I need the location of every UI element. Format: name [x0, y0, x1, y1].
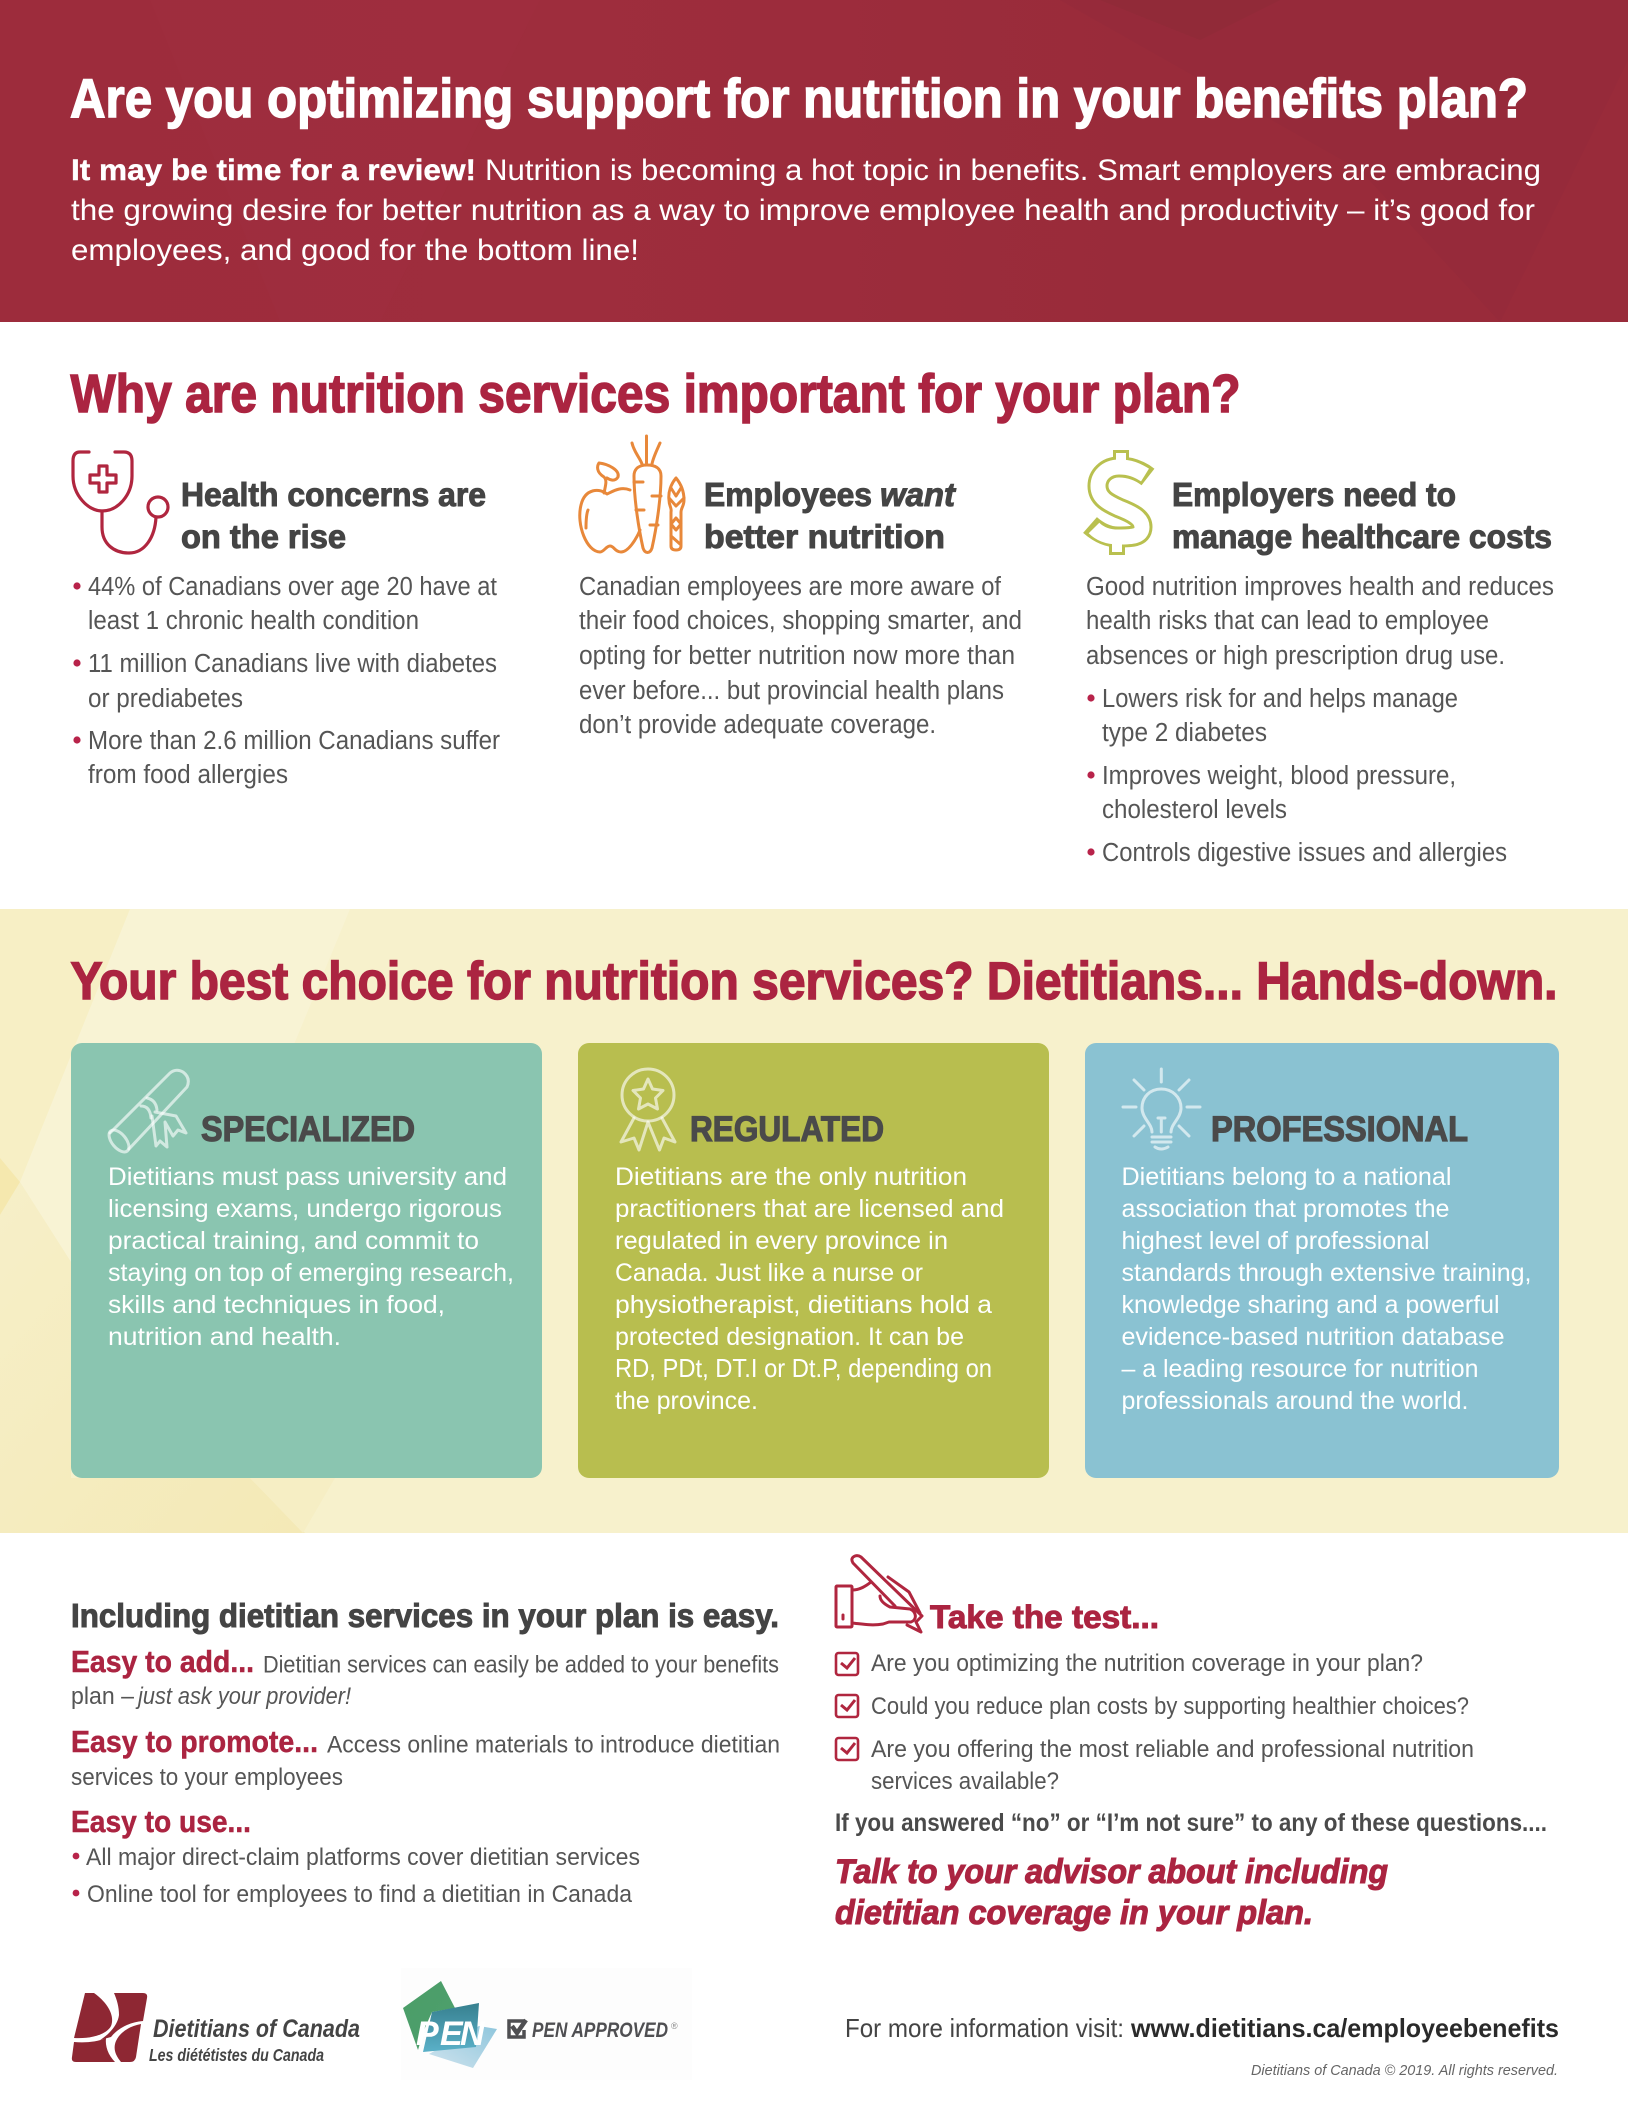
card text [108, 1163, 514, 1351]
icon: diploma scroll [105, 1070, 188, 1155]
easy to promote: Access online materials to introduce dietitian [327, 1732, 780, 1758]
paragraph: opting for better nutrition now more than [579, 642, 1015, 670]
bullet list: cholesterol levels [1102, 796, 1287, 824]
heading: Employers need to [1172, 476, 1456, 513]
easy to add: Easy to add... [71, 1644, 254, 1679]
easy to use [71, 1804, 640, 1908]
easy to promote: services to your employees [71, 1764, 343, 1791]
heading: want [880, 476, 957, 513]
card title: REGULATED [690, 1110, 884, 1149]
easy to promote: Easy to promote... [71, 1724, 318, 1759]
card text: – a leading resource for nutrition [1122, 1355, 1478, 1383]
easy to use: Online tool for employees to find a dietitian in Canada [87, 1881, 632, 1908]
card text: standards through extensive training, [1122, 1259, 1532, 1287]
paragraph: health risks that can lead to employee [1086, 607, 1489, 635]
intro paragraph: employees, and good for the bottom line! [71, 234, 639, 267]
bullet list: from food allergies [88, 761, 288, 789]
panel: employees want better nutrition [579, 436, 1022, 739]
icon: stethoscope [73, 452, 168, 553]
heading: Take the test... [930, 1599, 1159, 1635]
icon: hand holding pen [836, 1556, 922, 1632]
panel: header banner [0, 0, 1628, 322]
checklist: Could you reduce plan costs by supporting healthier choices? [871, 1693, 1469, 1720]
bullet list: 44% of Canadians over age 20 have at [88, 573, 497, 601]
bullet list [1087, 685, 1507, 867]
card text: physiotherapist, dietitians hold a [615, 1291, 992, 1319]
easy to use: Easy to use... [71, 1804, 251, 1839]
card text: regulated in every province in [615, 1227, 948, 1255]
bullet list [73, 573, 500, 789]
icon: dollar sign [1090, 450, 1148, 555]
heading: manage healthcare costs [1172, 518, 1552, 555]
easy to use: All major direct-claim platforms cover dietitian services [86, 1844, 640, 1871]
call to action: dietitian coverage in your plan. [835, 1894, 1313, 1932]
card text: licensing exams, undergo rigorous [108, 1195, 502, 1223]
card text: practical training, and commit to [108, 1227, 479, 1255]
heading: Health concerns are [181, 476, 486, 513]
checklist: Are you offering the most reliable and professional nutrition [871, 1736, 1474, 1763]
panel: employers need to manage costs [1086, 450, 1554, 867]
card text: association that promotes the [1122, 1195, 1450, 1223]
card text [1122, 1163, 1532, 1415]
icon: apple, carrot and asparagus [580, 436, 684, 552]
intro paragraph [71, 154, 1541, 267]
paragraph [1086, 573, 1554, 670]
paragraph [579, 573, 1022, 739]
paragraph: ever before... but provincial health plans [579, 677, 1004, 705]
logo wordmark: Dietitians of Canada [153, 2015, 360, 2043]
easy to add [71, 1644, 779, 1710]
more information link: For more information visit: [845, 2013, 1124, 2043]
bullet list: least 1 chronic health condition [88, 607, 419, 635]
follow-up question: If you answered “no” or “I’m not sure” to any of these questions.... [835, 1809, 1547, 1837]
icon: award ribbon [621, 1069, 675, 1150]
card text: practitioners that are licensed and [615, 1195, 1004, 1223]
card text: professionals around the world. [1122, 1387, 1468, 1415]
bullet list: Controls digestive issues and allergies [1102, 839, 1507, 867]
logo mark [72, 1993, 147, 2062]
paragraph: don’t provide adequate coverage. [579, 711, 936, 739]
card title: PROFESSIONAL [1211, 1110, 1468, 1149]
paragraph: their food choices, shopping smarter, and [579, 607, 1022, 635]
card text: protected designation. It can be [615, 1323, 964, 1351]
call to action: Talk to your advisor about including [835, 1853, 1388, 1891]
logo: PEN approved: ® [671, 2021, 678, 2031]
intro paragraph: Nutrition is becoming a hot topic in benefits. Smart employers are embracing [485, 154, 1541, 187]
panel: including dietitian services [71, 1597, 780, 1908]
bullet list: Lowers risk for and helps manage [1102, 685, 1458, 713]
panel: health concerns [73, 452, 500, 789]
paragraph: Canadian employees are more aware of [579, 573, 1002, 601]
checklist: services available? [871, 1768, 1059, 1795]
logo: Dietitians of Canada [72, 1993, 360, 2065]
card text: skills and techniques in food, [108, 1291, 445, 1319]
bullet list: Improves weight, blood pressure, [1102, 762, 1456, 790]
card text: Dietitians are the only nutrition [615, 1163, 967, 1191]
panel: best choice dietitians [0, 909, 1628, 1533]
call to action [835, 1853, 1388, 1932]
card: regulated [578, 1043, 1049, 1478]
card text: Dietitians must pass university and [108, 1163, 507, 1191]
heading: on the rise [181, 518, 346, 555]
easy to add: just ask your provider! [135, 1683, 351, 1710]
heading: better nutrition [704, 518, 945, 555]
checklist: Are you optimizing the nutrition coverage in your plan? [871, 1650, 1423, 1677]
heading: Employees [704, 476, 872, 513]
logo French wordmark: Les diététistes du Canada [149, 2045, 324, 2065]
card: professional [1085, 1043, 1559, 1478]
bullet list: or prediabetes [88, 685, 243, 713]
logo: PEN approved [401, 1968, 692, 2080]
card text: nutrition and health. [108, 1323, 341, 1351]
copyright: Dietitians of Canada © 2019. All rights reserved. [1251, 2062, 1558, 2079]
card text [615, 1163, 1004, 1415]
card text: evidence-based nutrition database [1122, 1323, 1504, 1351]
check mark [509, 2020, 526, 2037]
bullet list: type 2 diabetes [1102, 719, 1267, 747]
intro paragraph: It may be time for a review! [71, 154, 476, 187]
card text: staying on top of emerging research, [108, 1259, 514, 1287]
more information link: www.dietitians.ca/employeebenefits [1130, 2013, 1559, 2043]
card text: Dietitians belong to a national [1122, 1163, 1452, 1191]
heading [181, 476, 486, 555]
bullet list: More than 2.6 million Canadians suffer [88, 727, 500, 755]
more information link [845, 2013, 1559, 2043]
PEN mark [403, 1981, 497, 2068]
intro paragraph: the growing desire for better nutrition as a way to improve employee health and productivity – it’s good for [71, 194, 1535, 227]
card title: SPECIALIZED [201, 1110, 415, 1149]
card text: RD, PDt, DT.I or Dt.P, depending on [615, 1353, 992, 1383]
checklist [836, 1650, 1474, 1795]
PEN mark: PEN [416, 2015, 486, 2053]
card text: the province. [615, 1387, 758, 1415]
heading: Including dietitian services in your plan is easy. [71, 1597, 779, 1634]
card text: highest level of professional [1122, 1227, 1430, 1255]
heading [1172, 476, 1552, 555]
heading: why nutrition services: Why are nutrition services important for your plan? [70, 364, 1240, 424]
card text: Canada. Just like a nurse or [615, 1259, 923, 1287]
PEN approved label: PEN APPROVED [532, 2019, 668, 2042]
easy to add: Dietitian services can easily be added to your benefits [263, 1652, 779, 1678]
panel: take the test [835, 1556, 1547, 1932]
bullet list: 11 million Canadians live with diabetes [88, 650, 497, 678]
easy to add: plan – [71, 1683, 134, 1710]
heading [704, 476, 957, 555]
card text: knowledge sharing and a powerful [1122, 1291, 1500, 1319]
easy to promote [71, 1724, 780, 1791]
paragraph: Good nutrition improves health and reduces [1086, 573, 1554, 601]
paragraph: absences or high prescription drug use. [1086, 642, 1505, 670]
card: specialized [71, 1043, 542, 1478]
icon: light bulb [1123, 1069, 1200, 1149]
